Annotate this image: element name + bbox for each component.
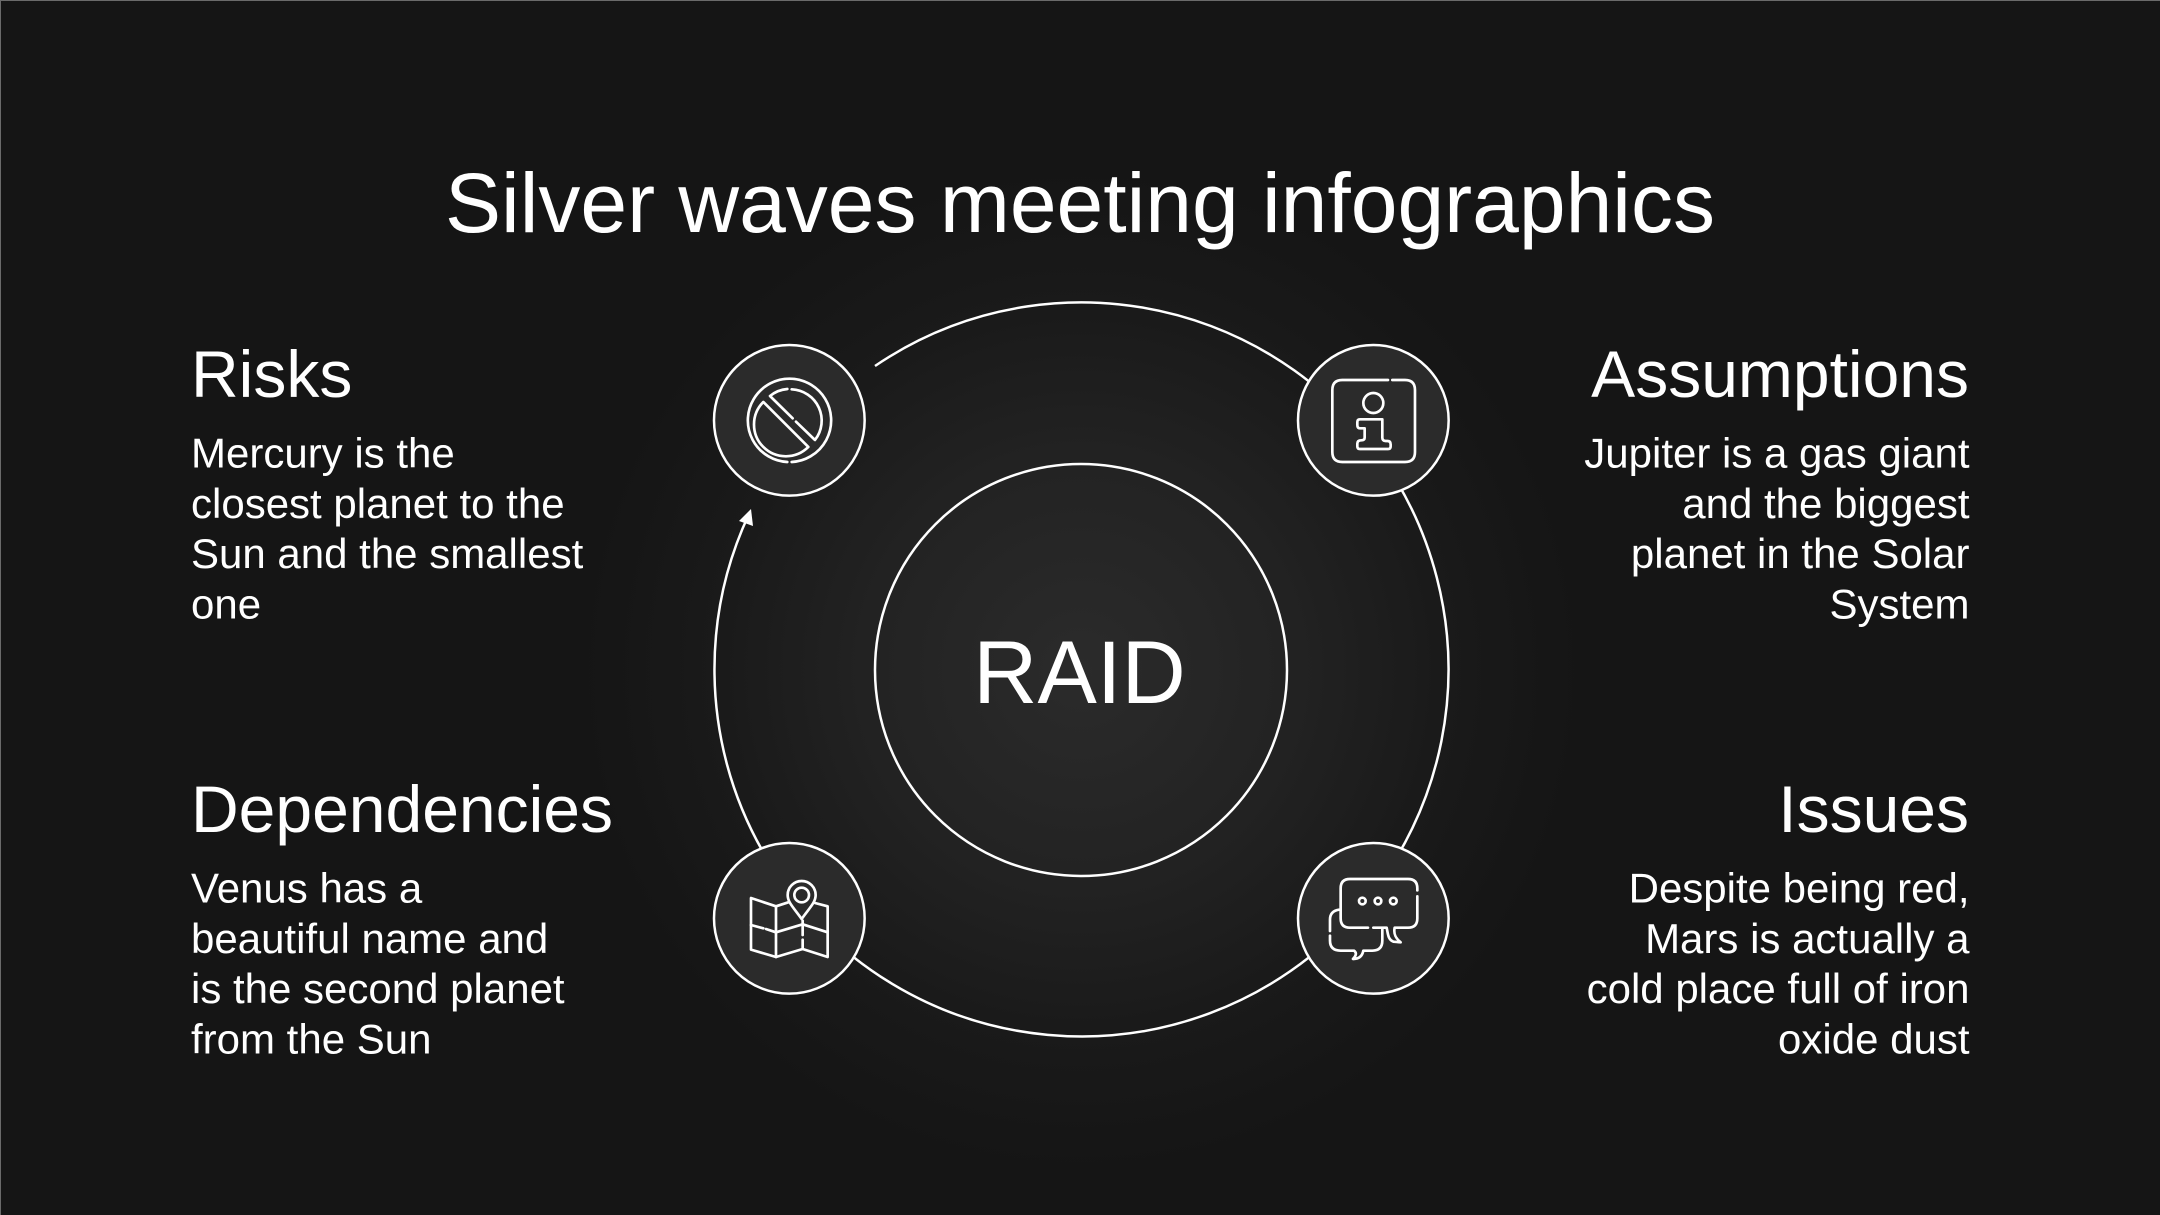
text block: dependencies: beautiful name and xyxy=(191,915,548,962)
text block: assumptions: planet in the Solar xyxy=(1631,530,1970,577)
text block: risks: one xyxy=(191,580,261,628)
text block: assumptions: and the biggest xyxy=(1682,480,1970,527)
center circle: RAID: RAID xyxy=(973,622,1186,722)
icon: dependencies map xyxy=(714,843,865,994)
text block: assumptions: System xyxy=(1829,580,1970,628)
text block: issues: Mars is actually a xyxy=(1645,915,1970,962)
text block: risks: closest planet to the xyxy=(191,480,565,527)
title: Silver waves meeting infographics xyxy=(445,156,1715,250)
text block: assumptions: Assumptions xyxy=(1591,337,1969,411)
text block: dependencies: is the second planet xyxy=(191,965,565,1012)
text block: issues: Issues xyxy=(1778,772,1969,846)
text block: risks xyxy=(191,337,584,628)
outer cycle ring with arrow xyxy=(714,302,1448,1036)
text block: issues: Despite being red, xyxy=(1629,864,1970,912)
text block: dependencies xyxy=(191,772,613,1062)
text block: issues: oxide dust xyxy=(1778,1016,1970,1062)
icon: issues chat bubbles xyxy=(1298,843,1449,994)
text block: risks: Mercury is the xyxy=(191,430,455,476)
text block: dependencies: Venus has a xyxy=(191,864,423,912)
text block: assumptions xyxy=(1584,337,1970,628)
icon: assumptions info box xyxy=(1298,345,1449,496)
text block: risks: Risks xyxy=(191,337,352,411)
icon: risks prohibited sign xyxy=(714,345,865,496)
text block: assumptions: Jupiter is a gas giant xyxy=(1584,430,1970,476)
text block: dependencies: from the Sun xyxy=(191,1016,431,1062)
center circle: RAID xyxy=(875,464,1287,876)
text block: dependencies: Dependencies xyxy=(191,772,613,846)
text block: risks: Sun and the smallest xyxy=(191,530,584,577)
text block: issues xyxy=(1587,772,1970,1062)
text block: issues: cold place full of iron xyxy=(1587,965,1970,1012)
